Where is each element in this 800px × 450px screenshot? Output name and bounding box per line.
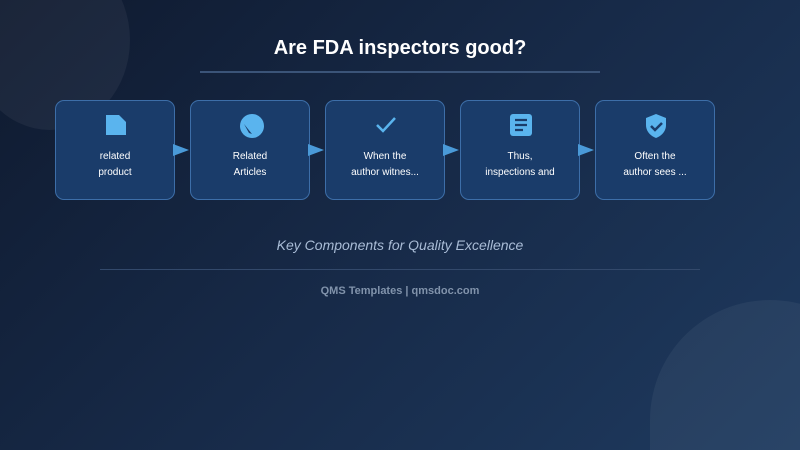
step 5: Often the: [634, 151, 676, 162]
subtitle: Key Components for Quality Excellence: [277, 237, 523, 253]
step 3: When the: [364, 151, 406, 162]
step 1: product: [98, 167, 132, 178]
step 3: [325, 100, 445, 200]
icon: globe: [240, 114, 264, 138]
step 1: related: [100, 151, 130, 162]
step 4: [460, 100, 580, 200]
title: Are FDA inspectors good?: [274, 37, 526, 59]
step 2: Related: [233, 151, 267, 162]
footer: QMS Templates | qmsdoc.com: [321, 285, 479, 297]
arrow 2: [308, 144, 324, 156]
icon: check: [376, 117, 396, 133]
step 4: Thus,: [507, 151, 532, 162]
step 2: Articles: [234, 167, 266, 178]
step 2: [190, 100, 310, 200]
icon: note: [510, 114, 532, 136]
step 5: author sees ...: [623, 167, 687, 178]
arrow 3: [443, 144, 459, 156]
step 4: inspections and: [485, 167, 555, 178]
icon: document: [106, 115, 126, 135]
step 5: [595, 100, 715, 200]
step 3: author witnes...: [351, 167, 419, 178]
icon: shield: [646, 114, 666, 138]
arrow 4: [578, 144, 594, 156]
arrow 1: [173, 144, 189, 156]
step 1: [55, 100, 175, 200]
